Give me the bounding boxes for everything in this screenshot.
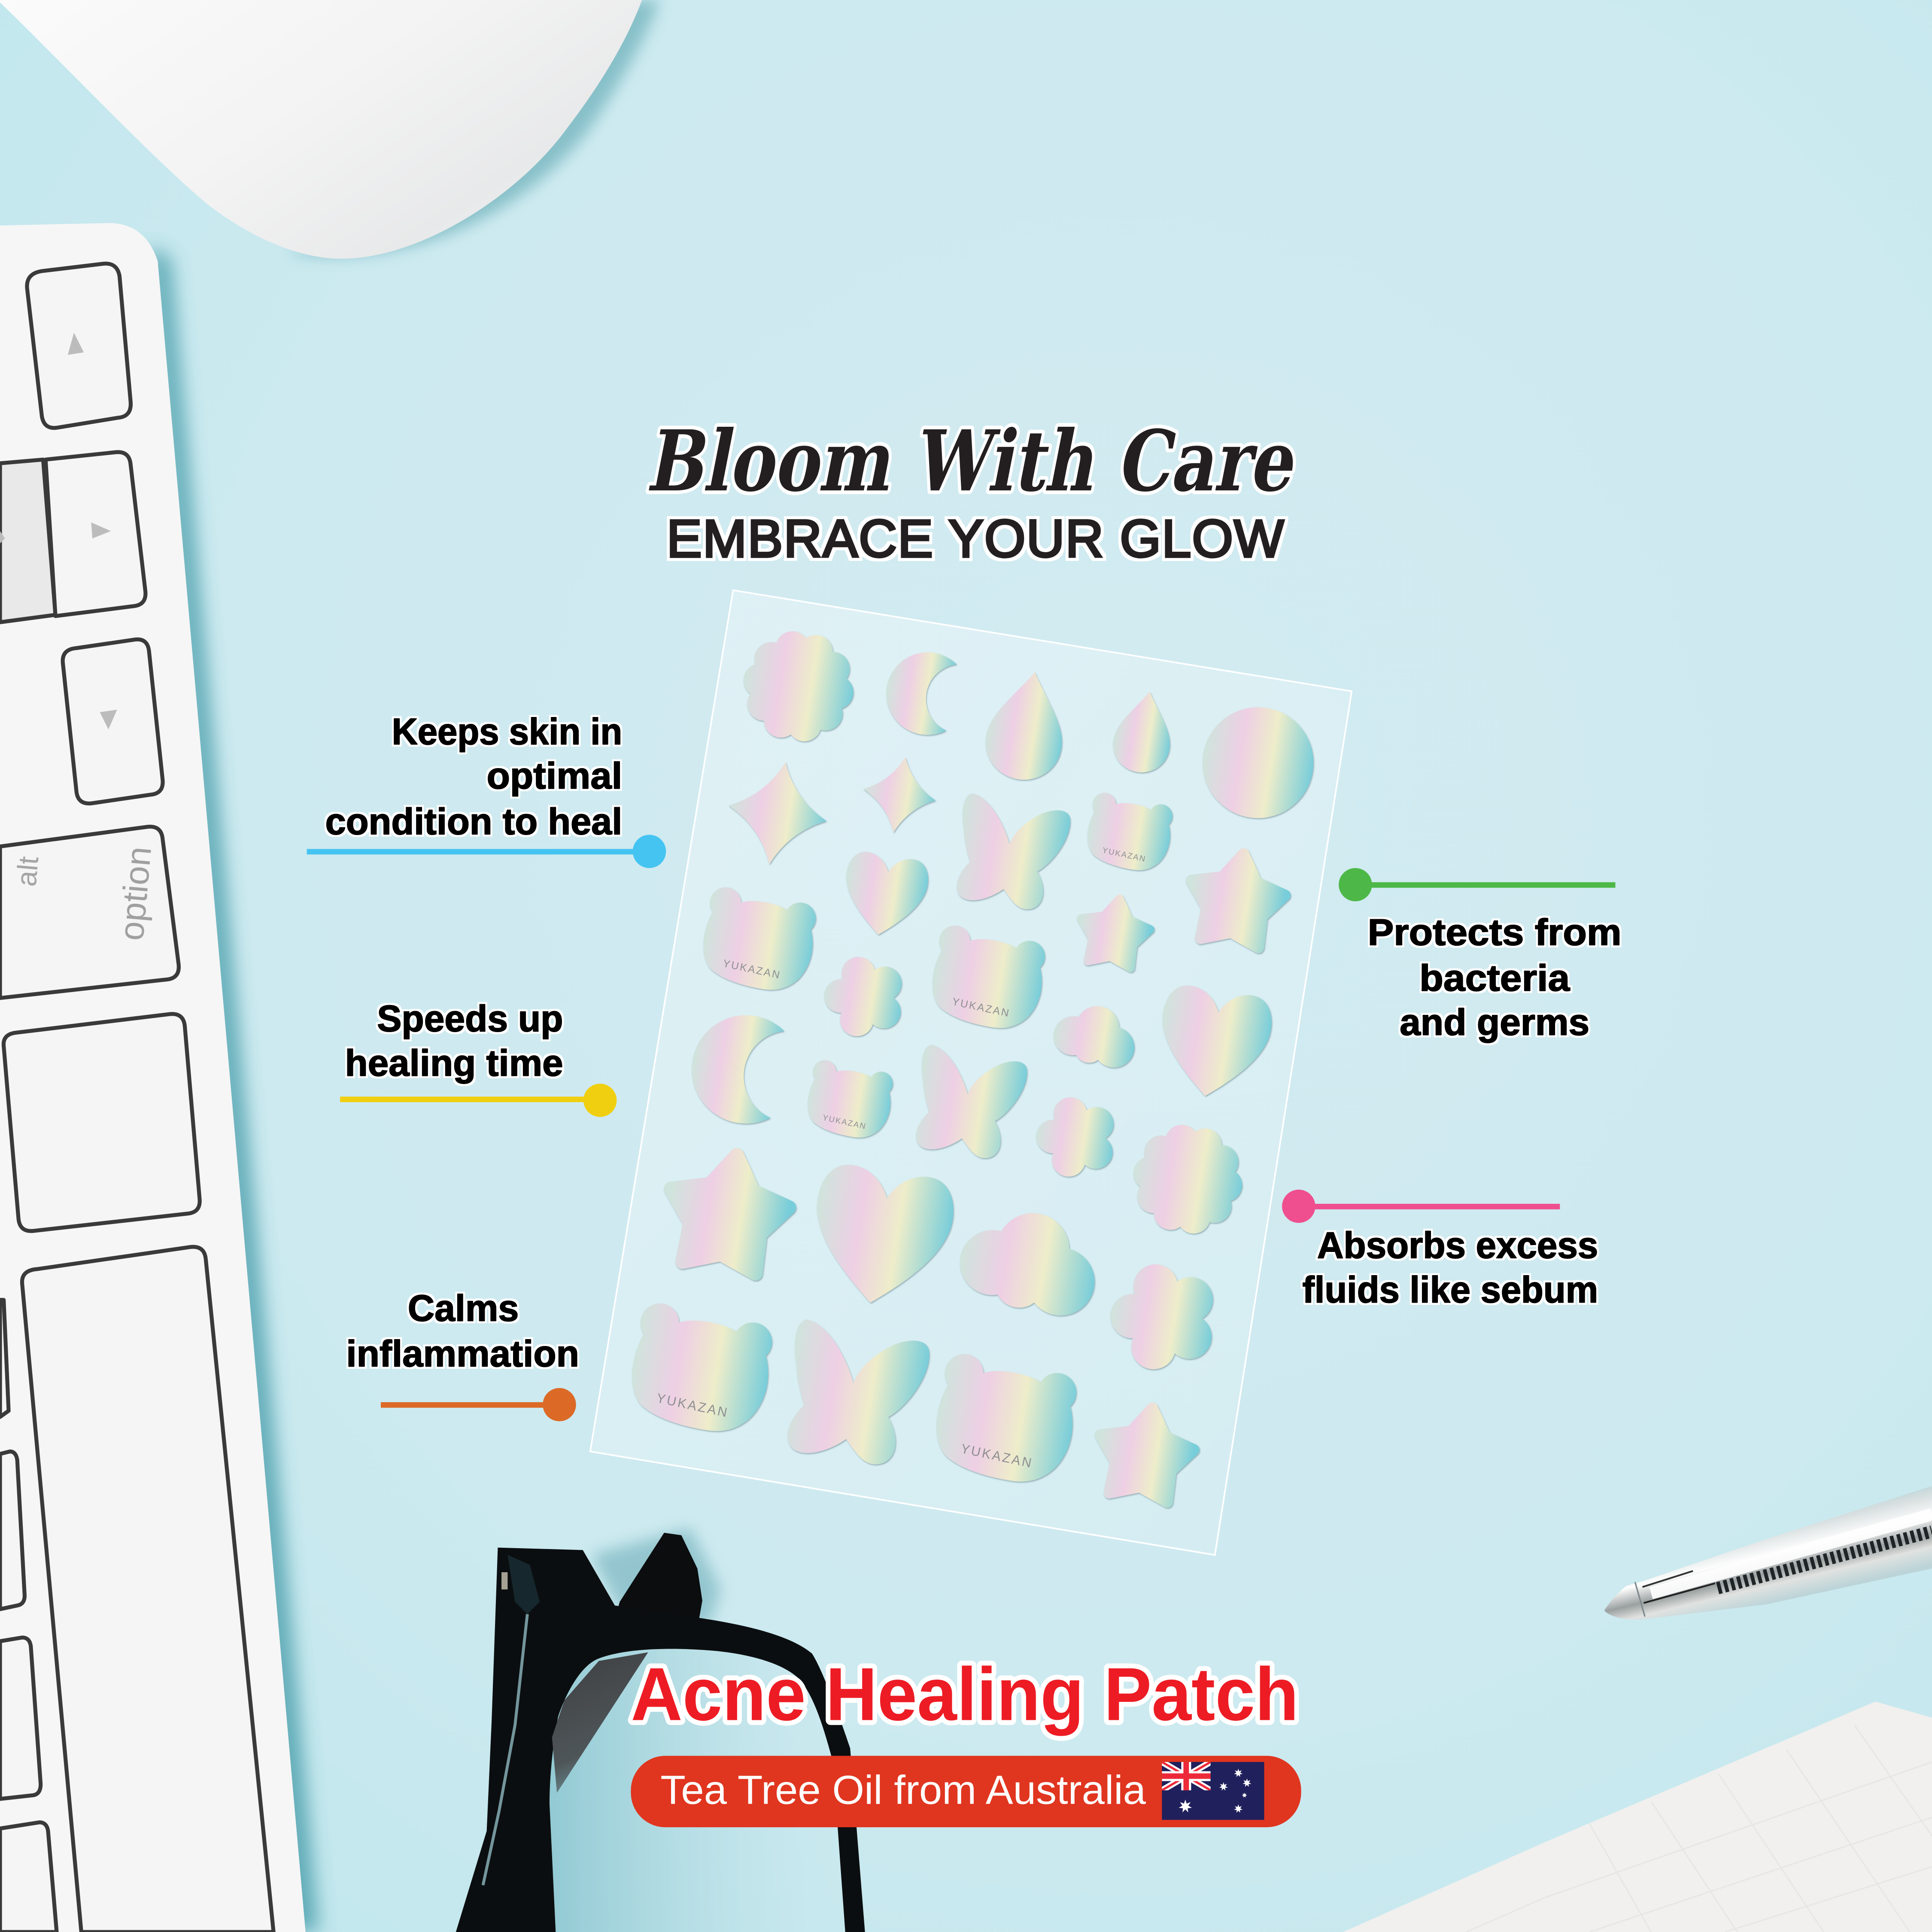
callout: speeds up [340, 998, 617, 1117]
patch: butterfly 2 [908, 1044, 1030, 1163]
pen [1604, 1486, 1932, 1620]
patch: heart small [838, 849, 931, 941]
patch: heart large [803, 1160, 959, 1313]
callout: keeps skin: condition to heal [325, 801, 622, 842]
callout: keeps skin: optimal [487, 756, 622, 797]
callout: calms: inflammation [346, 1334, 579, 1375]
patch: bear medium 2: YUKAZAN [951, 996, 1010, 1019]
patch: bear small 1 [1083, 791, 1176, 875]
callout: calms [346, 1288, 579, 1421]
patch: star 3 [1091, 1401, 1199, 1505]
patch: cloud small [1050, 1000, 1140, 1070]
keyboard: alt [10, 855, 44, 888]
patch: diamond large [720, 754, 835, 872]
callout: keeps skin [307, 711, 666, 868]
patch: bear small 1: YUKAZAN [1102, 845, 1146, 863]
patch: bear small 2: YUKAZAN [822, 1113, 866, 1131]
patch: bear large 2: YUKAZAN [960, 1441, 1033, 1470]
notebook paper [1343, 1701, 1932, 1932]
patch: bear medium 1 [697, 885, 820, 996]
callout: protects [1339, 868, 1622, 1043]
patch: star 1 [1183, 847, 1291, 951]
icon: Australian flag [1162, 1762, 1264, 1820]
patch sheet [590, 590, 1352, 1555]
title: Bloom With Care [642, 412, 1306, 510]
callout: speeds up: healing time [345, 1042, 563, 1084]
callout: protects: Protects from [1368, 912, 1622, 953]
patch: heart medium [1151, 982, 1276, 1105]
product name: Acne Healing Patch [631, 1653, 1299, 1736]
callout: absorbs [1282, 1190, 1598, 1310]
glasses [456, 1528, 865, 1932]
patch: bear small 2 [803, 1058, 896, 1142]
origin pill [631, 1756, 1301, 1827]
patch: bear large 1 [625, 1300, 777, 1438]
patch: butterfly large [778, 1318, 932, 1470]
patch: circle [1194, 699, 1321, 826]
patches [625, 625, 1321, 1505]
patch: clover large [1103, 1258, 1222, 1378]
patch: butterfly 1 [949, 793, 1072, 914]
origin pill: Tea Tree Oil from Australia [660, 1768, 1146, 1813]
patch: bear medium 1: YUKAZAN [722, 958, 781, 981]
patch: drop large [980, 666, 1072, 785]
patch: flower 2 [1125, 1118, 1250, 1240]
mouse [0, 0, 659, 259]
patch: bear large 2 [929, 1351, 1081, 1489]
patch: bear large 1: YUKAZAN [655, 1391, 729, 1420]
callout: protects: bacteria [1419, 957, 1570, 999]
patch: cloud large [954, 1203, 1104, 1320]
callout: keeps skin: Keeps skin in [392, 711, 622, 752]
callout: absorbs: fluids like sebum [1302, 1269, 1598, 1310]
callout: calms: Calms [408, 1288, 519, 1329]
subtitle: EMBRACE YOUR GLOW [667, 509, 1284, 568]
patch: drop small [1109, 687, 1178, 777]
callout: speeds up: Speeds up [377, 998, 563, 1039]
callout: absorbs: Absorbs excess [1317, 1225, 1598, 1266]
patch: clover 2 [1030, 1093, 1120, 1183]
patch: flower 1 [735, 625, 862, 748]
keyboard: option [112, 845, 159, 942]
patch: clover 1 [818, 952, 908, 1042]
callout: protects: and germs [1400, 1002, 1589, 1043]
patch: crescent large [684, 1007, 786, 1128]
patch: crescent small [881, 647, 958, 738]
patch: diamond small [857, 751, 942, 838]
patch: bear medium 2 [927, 923, 1049, 1034]
patch: star 2 [1075, 893, 1154, 970]
keyboard [0, 223, 318, 1932]
patch: star large [660, 1146, 796, 1277]
